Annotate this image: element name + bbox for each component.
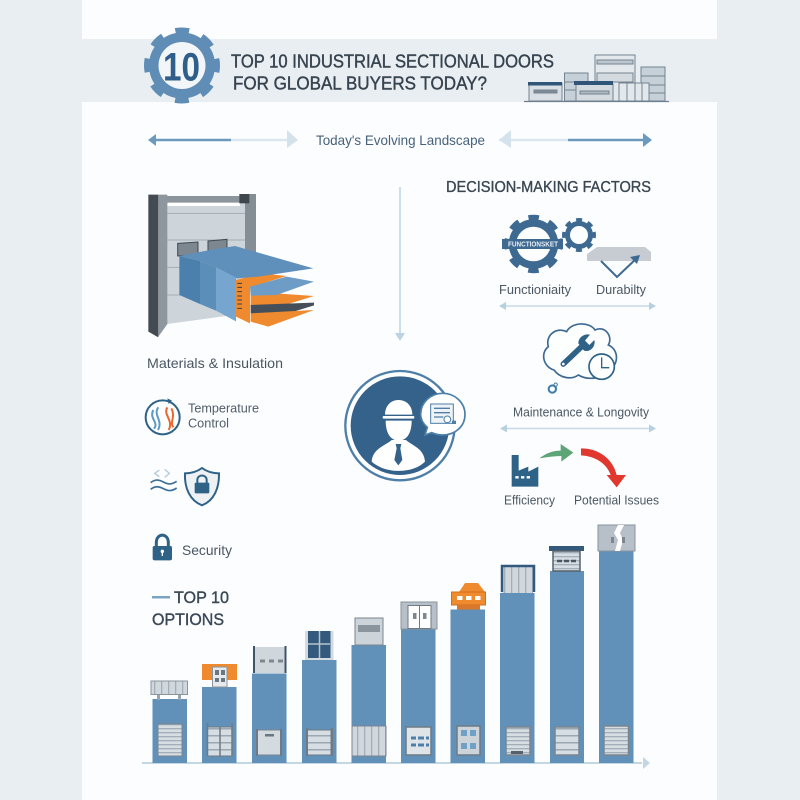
arrow: vertical connector: [395, 187, 405, 341]
arrow: red potential issues: [581, 448, 626, 487]
subtitle with arrows: Today's Evolving Landscape: [316, 132, 485, 148]
label: temperature control: Control: [188, 416, 229, 430]
bar 9: [549, 546, 584, 763]
icon: maintenance cloud: [544, 324, 616, 393]
label: efficiency: Efficiency: [504, 492, 555, 508]
bar 1: [151, 681, 188, 763]
panel: decision-making factors: [446, 179, 659, 508]
panel: security: [153, 535, 232, 560]
label: materials and insulation: Materials & Insulation: [147, 355, 283, 371]
label: temperature control: Temperature: [188, 400, 259, 416]
bar 2: [202, 664, 237, 763]
arrow: divider two: [500, 424, 656, 432]
icon: durability: [587, 247, 651, 277]
heading: decision-making factors: DECISION-MAKING FACTORS: [446, 179, 651, 196]
bar 6: [401, 602, 437, 763]
icon: temperature: [146, 398, 180, 434]
title: TOP 10 INDUSTRIAL SECTIONAL DOORS: [231, 52, 554, 72]
waves: [151, 480, 177, 491]
title: FOR GLOBAL BUYERS TODAY?: [233, 74, 487, 94]
label: potential issues: Potential Issues: [574, 492, 659, 508]
icon: factory: [512, 455, 538, 487]
icon: engineer in circle: [345, 371, 465, 480]
bar 8: [500, 566, 534, 763]
heading: top 10 options: [152, 588, 229, 629]
panel: materials and insulation: [147, 194, 314, 371]
heading: top 10 options: TOP 10: [174, 588, 229, 607]
heading: top 10 options: OPTIONS: [152, 610, 224, 629]
bar chart: top 10 options: [142, 525, 650, 769]
panel: temperature control: [146, 398, 259, 434]
arrow: green efficiency: [539, 444, 573, 462]
icon: padlock: [153, 535, 172, 560]
header band: [82, 26, 717, 105]
label: functionality: Functioniaity: [499, 282, 571, 297]
axis: [142, 757, 650, 769]
label: temperature control: [188, 400, 259, 430]
shield with lock: [185, 468, 219, 505]
bar 4: [302, 631, 336, 763]
label: durability: Durabilty: [596, 282, 646, 297]
icon: gear with number 10: 10: [163, 46, 200, 90]
icon: factory buildings: [524, 55, 669, 102]
icon: sectional door with insulation layers: [148, 194, 314, 337]
icon: gear with number 10: [142, 26, 222, 105]
speech bubble: [421, 393, 465, 435]
bar 10: [598, 525, 635, 763]
icon: functionality gears: FUNCTIONSKET: [508, 242, 559, 248]
icon: waves and shield: [151, 468, 219, 505]
title: [231, 52, 554, 94]
bar 7: [450, 583, 486, 763]
page panel: [82, 0, 717, 800]
bar 5: [352, 618, 386, 763]
arrow: divider one: [499, 302, 656, 310]
icon: functionality gears: [502, 213, 597, 275]
bar 3: [252, 646, 286, 763]
subtitle with arrows: [148, 130, 652, 148]
label: maintenance and longevity: Maintenance & Longovity: [513, 404, 649, 420]
code brackets: [155, 469, 169, 477]
label: security: Security: [182, 542, 232, 558]
